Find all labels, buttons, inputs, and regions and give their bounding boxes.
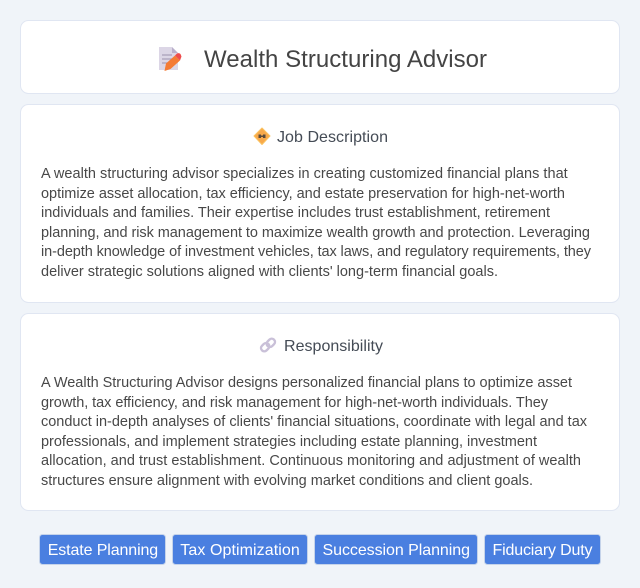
icon: chain link xyxy=(260,337,276,353)
text block: job description: deliver strategic solutions aligned with clients' long-term financial goals. xyxy=(41,264,498,280)
panel: responsibility xyxy=(20,314,620,510)
text block: job description xyxy=(41,166,592,280)
text block: responsibility: conduct in-depth analyses of clients' financial situations, coordinate with legal and tax xyxy=(41,414,588,430)
tag: succession planning: Succession Planning xyxy=(322,542,470,559)
title text: Wealth Structuring Advisor xyxy=(204,46,487,73)
panel: title xyxy=(20,20,620,94)
tag: tax optimization xyxy=(172,534,308,564)
icon: document with pencil xyxy=(159,47,182,71)
tag: fiduciary duty: Fiduciary Duty xyxy=(492,542,592,559)
text block: job description: A wealth structuring advisor specializes in creating customized financial plans that xyxy=(41,166,568,182)
text block: job description: individuals and families. Their expertise includes trust establishment, retirement xyxy=(41,205,550,221)
text block: job description: planning, and risk management to maximize wealth growth and protection. Leveraging xyxy=(41,225,590,241)
text block: responsibility xyxy=(41,375,588,489)
panel: job description xyxy=(20,104,620,302)
tag: succession planning xyxy=(314,534,478,564)
tag: tax optimization: Tax Optimization xyxy=(180,542,300,559)
text block: job description: in-depth knowledge of investment vehicles, tax laws, and regulatory requirements, they xyxy=(41,244,592,260)
text block: responsibility: growth, tax efficiency, and risk management for high-net-worth individuals. They xyxy=(41,395,549,411)
tag: estate planning xyxy=(40,534,166,564)
heading: responsibility: Responsibility xyxy=(284,338,383,355)
text block: responsibility: structures ensure alignment with evolving market conditions and client goals. xyxy=(41,473,533,489)
text block: responsibility: allocation, and trust establishment. Continuous monitoring and adjustment of wealth xyxy=(41,453,581,469)
text block: responsibility: A Wealth Structuring Advisor designs personalized financial plans to optimize asset xyxy=(41,375,572,391)
text block: responsibility: professionals, and implement strategies including estate planning, investment xyxy=(41,434,537,450)
tag: estate planning: Estate Planning xyxy=(48,542,158,559)
icon: diamond sign xyxy=(254,128,270,144)
text block: job description: optimize asset allocation, tax efficiency, and estate preservation for high-net-worth xyxy=(41,186,565,202)
heading: job description: Job Description xyxy=(277,129,388,146)
tag: fiduciary duty xyxy=(484,534,600,564)
